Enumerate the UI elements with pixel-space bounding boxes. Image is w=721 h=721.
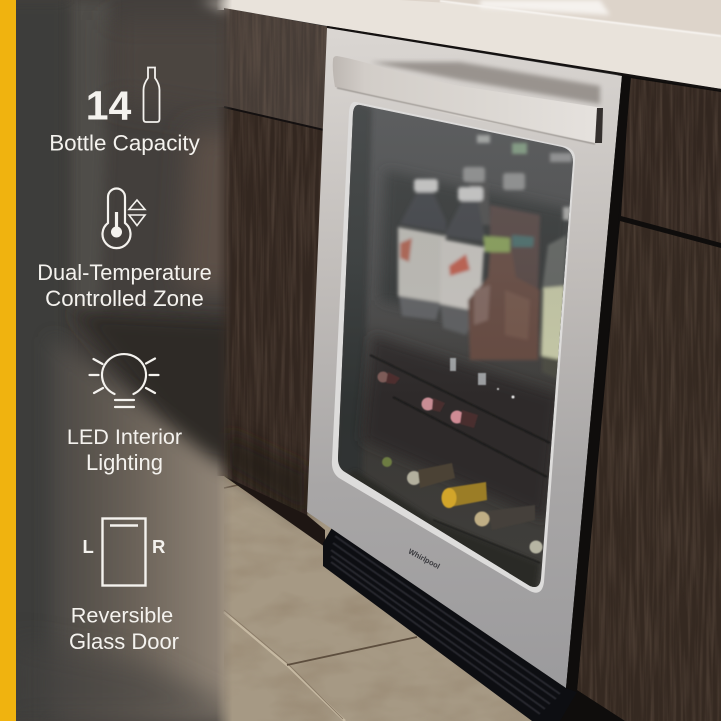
left wood cabinet <box>224 8 329 547</box>
icon: light bulb <box>90 354 158 407</box>
icon: thermometer with arrows <box>103 188 145 248</box>
feature: LED lighting: Lighting <box>86 450 163 475</box>
display and lower wine bottles <box>378 358 542 554</box>
feature: dual temperature <box>37 188 212 311</box>
glass window trim <box>332 102 575 593</box>
glass window <box>338 105 573 587</box>
feature: bottle capacity <box>49 68 201 156</box>
label: Dual-Temperature <box>37 260 212 285</box>
icon: door with L and R: L <box>82 536 94 557</box>
feature: dual temperature: Controlled Zone <box>45 286 204 311</box>
label: Reversible <box>71 602 173 628</box>
icon: door with L and R: R <box>152 536 165 557</box>
label: Bottle Capacity <box>49 130 201 156</box>
floor tiles <box>224 470 604 721</box>
feature: LED lighting <box>67 354 182 475</box>
panel: translucent left overlay <box>16 0 231 721</box>
appliance: stainless door <box>307 28 631 692</box>
door handle <box>333 56 603 144</box>
glass haze <box>345 105 573 306</box>
icon: bottle <box>144 68 160 122</box>
drinks on upper shelf <box>398 135 572 378</box>
scene underlay beneath panel edge <box>190 0 230 721</box>
right wood cabinets <box>545 72 721 721</box>
label: LED Interior <box>67 424 182 449</box>
feature: reversible door <box>69 518 179 654</box>
fridge interior <box>335 100 575 600</box>
feature: reversible door: Glass Door <box>69 629 179 654</box>
icon: door with L and R <box>82 518 165 586</box>
black kick plate vent <box>323 526 577 721</box>
number 14: 14 <box>86 82 131 128</box>
countertop <box>224 0 721 90</box>
brand logo: Whirlpool <box>407 547 442 571</box>
accent bar <box>0 0 16 721</box>
